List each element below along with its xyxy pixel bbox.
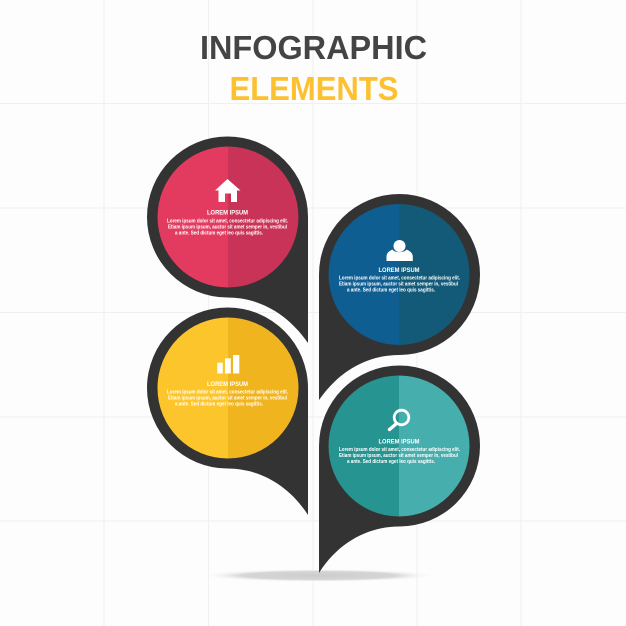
blue pin shape: [319, 194, 480, 400]
blue heading: LOREM IPSUM: [378, 267, 420, 274]
teal pin shape: [319, 366, 480, 573]
red circle right half: [228, 146, 298, 288]
panel: blue user: [319, 194, 480, 400]
blue body text: Etiam ipsum ipsum, auctor sit amet semper in, vestibul: [339, 282, 458, 288]
blue body text: Lorem ipsum dolor sit amet, consectetur adipiscing elit.: [339, 276, 460, 282]
teal heading: LOREM IPSUM: [378, 438, 420, 446]
title: [200, 29, 427, 107]
blue circle left half: [329, 204, 399, 345]
icon: magnifier: [390, 410, 409, 430]
yellow body text: a ante. Sed dictum eget leo quis sagittis.: [175, 402, 263, 408]
yellow circle right half: [228, 318, 298, 458]
red body text: Lorem ipsum dolor sit amet, consectetur adipiscing elit.: [167, 218, 288, 224]
panel: yellow chart: [147, 308, 308, 515]
yellow body text: Etiam ipsum ipsum, auctor sit amet semper in, vestibul: [168, 396, 287, 402]
yellow body text: [167, 390, 288, 408]
blue body text: [339, 276, 460, 294]
heading: infographic: INFOGRAPHIC: [200, 29, 427, 66]
icon: bar chart: [217, 355, 239, 374]
red body text: a ante. Sed dictum eget leo quis sagittis.: [175, 230, 263, 236]
teal body text: [339, 447, 460, 465]
icon: house: [215, 179, 240, 202]
teal body text: Lorem ipsum dolor sit amet, consectetur adipiscing elit.: [339, 447, 460, 453]
panel: red home: [147, 136, 308, 343]
red heading: LOREM IPSUM: [207, 210, 248, 216]
teal body text: a ante. Sed dictum eget leo quis sagittis.: [347, 459, 435, 465]
yellow heading: LOREM IPSUM: [207, 381, 248, 388]
red body text: [167, 218, 288, 236]
yellow pin shape: [147, 308, 308, 515]
yellow circle left half: [157, 318, 228, 458]
icon: person: [386, 240, 413, 261]
yellow body text: Lorem ipsum dolor sit amet, consectetur adipiscing elit.: [167, 390, 288, 396]
red circle left half: [158, 146, 228, 288]
red body text: Etiam ipsum ipsum, auctor sit amet semper in, vestibul: [168, 224, 287, 230]
ground shadow: [201, 569, 437, 582]
teal circle right half: [399, 376, 470, 516]
heading: elements: ELEMENTS: [230, 70, 398, 107]
blue circle right half: [399, 204, 469, 345]
teal circle left half: [328, 376, 399, 516]
blue body text: a ante. Sed dictum eget leo quis sagittis.: [347, 288, 435, 294]
teal body text: Etiam ipsum ipsum, auctor sit amet semper in, vestibul: [339, 453, 458, 459]
panel: teal search: [319, 366, 480, 573]
red pin shape: [147, 136, 308, 343]
